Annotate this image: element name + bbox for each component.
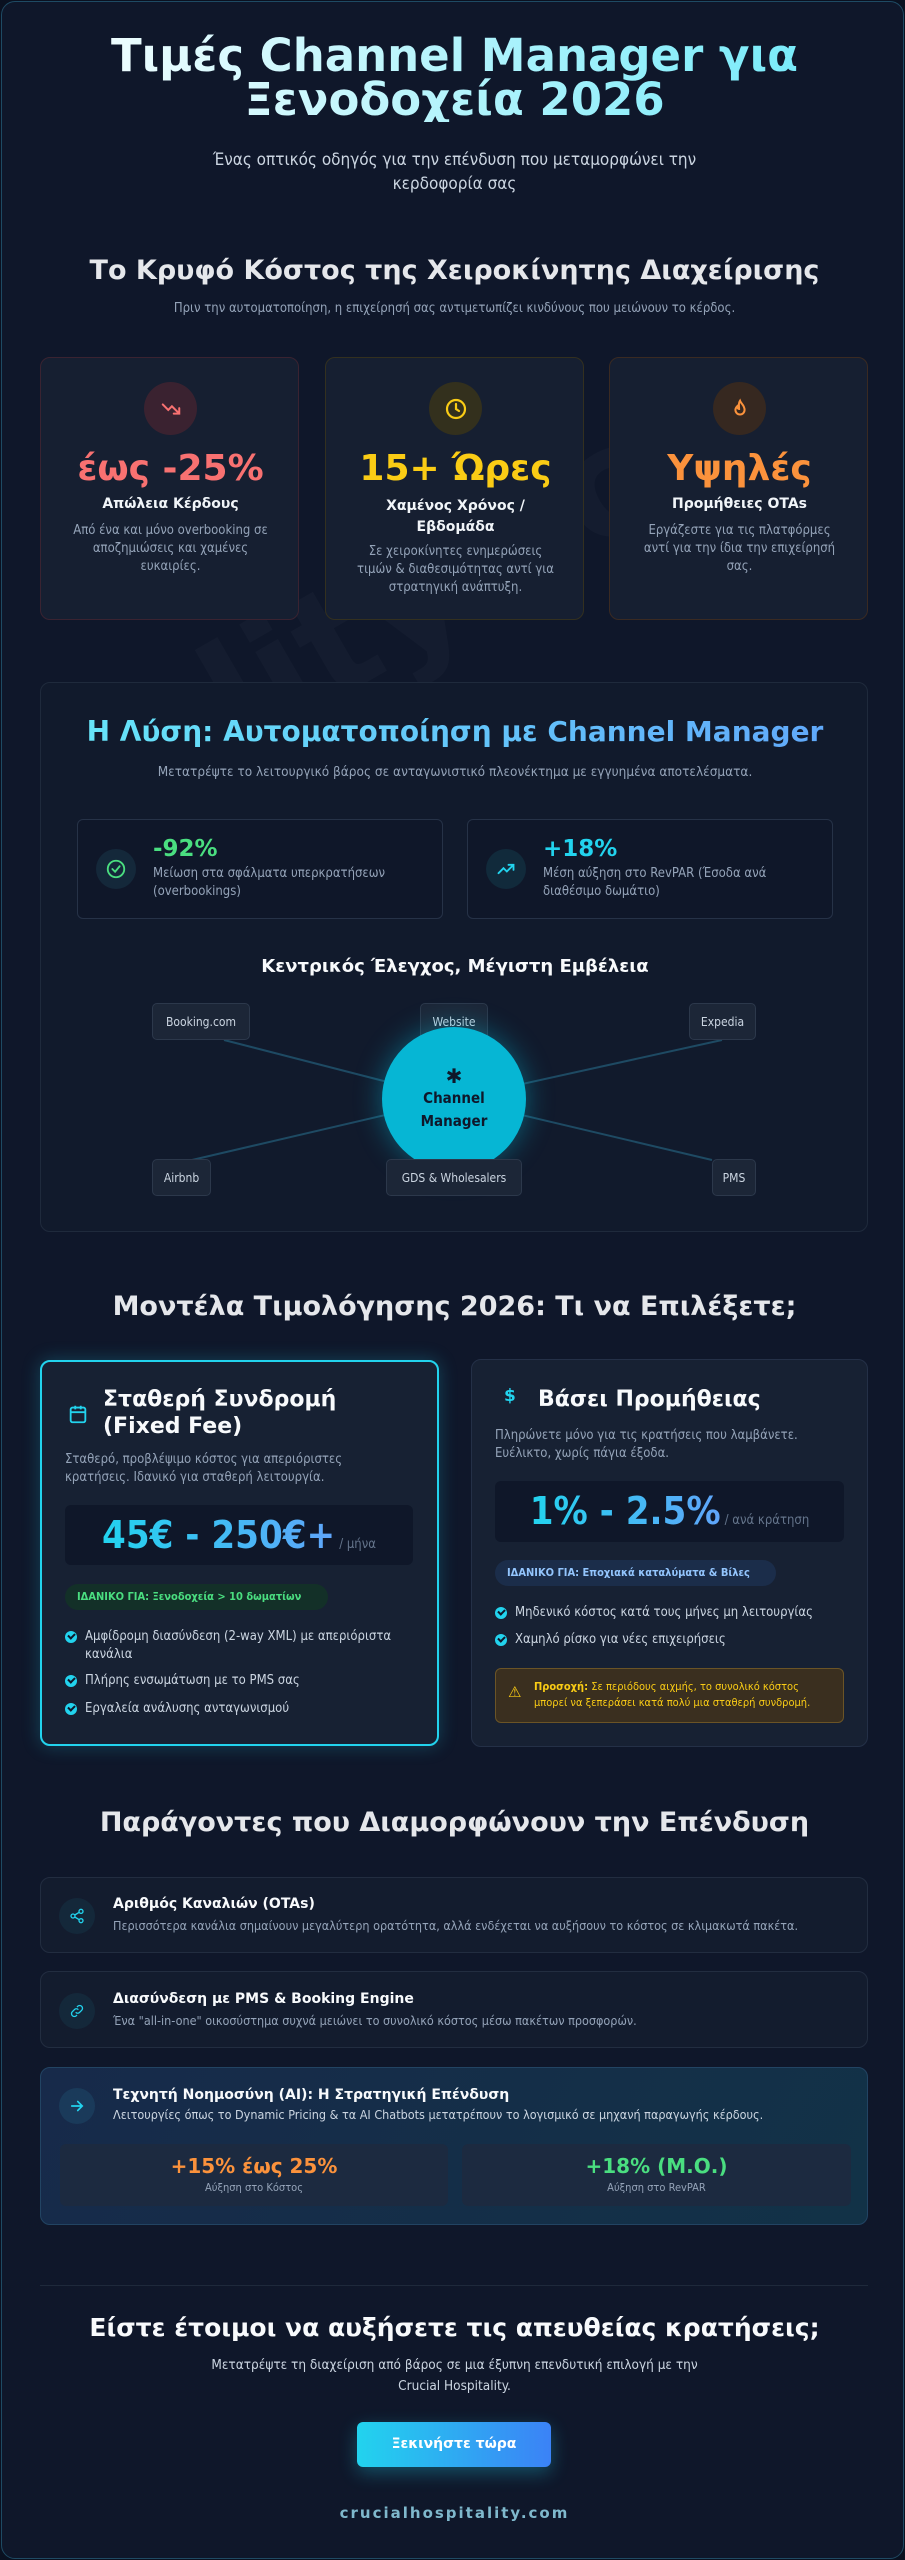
icon: dollar: $ (504, 1386, 516, 1406)
icon: link (59, 1993, 95, 2029)
factor title: Διασύνδεση με PMS & Booking Engine (113, 1991, 414, 2007)
metric: cost increase: Αύξηση στο Κόστος (205, 2181, 303, 2194)
stat value: +18% (543, 836, 617, 862)
CTA text (211, 2357, 698, 2394)
factor desc: Λειτουργίες όπως το Dynamic Pricing & τα AI Chatbots μετατρέπουν το λογισμικό σε μηχανή παραγωγής κέρδους. (113, 2107, 763, 2122)
CTA button: Ξεκινήστε τώρα (392, 2436, 516, 2452)
subtitle: Ένας οπτικός οδηγός για την επένδυση που μεταμορφώνει την κερδοφορία σας (213, 150, 696, 194)
node: Airbnb (152, 1159, 211, 1196)
label: Εβδομάδα (416, 519, 494, 535)
hub: Channel Manager: Manager (421, 1112, 487, 1130)
icon: trending up (486, 849, 526, 889)
price box: / μήνα (339, 1537, 376, 1552)
card: commission (471, 1359, 868, 1747)
title: Τιμές Channel Manager για (111, 29, 798, 82)
stat box: overbookings (77, 819, 443, 919)
factor: PMS (40, 1971, 868, 2048)
connector lines (192, 1040, 722, 1161)
heading: pricing models: Μοντέλα Τιμολόγησης 2026: Τι να Επιλέξετε; (113, 1291, 796, 1322)
card desc: Σταθερό, προβλέψιμο κόστος για απεριόριστες κρατήσεις. Ιδανικό για σταθερή λειτουργία. (65, 1452, 342, 1485)
watermark: tality.com (22, 304, 834, 873)
icon: trending down (144, 382, 197, 435)
node: Booking.com: Booking.com (166, 1014, 236, 1028)
node: PMS: PMS (723, 1170, 745, 1184)
icon: flame (713, 382, 766, 435)
heading: hidden cost: Το Κρυφό Κόστος της Χειροκίνητης Διαχείρισης (90, 255, 819, 286)
stat desc: Μέση αύξηση στο RevPAR (Έσοδα ανά διαθέσιμο δωμάτιο) (543, 866, 766, 899)
metric: revpar (462, 2144, 851, 2206)
card: OTA commissions (609, 357, 868, 620)
badge: ideal for seasonal (495, 1560, 776, 1586)
node: Website (420, 1003, 488, 1040)
CTA button (357, 2422, 551, 2467)
price box: 1% - 2.5% (530, 1489, 721, 1533)
price box: 45€ - 250€+ (102, 1513, 335, 1557)
panel: solution (40, 682, 868, 1232)
diagram: channel hub (152, 1003, 756, 1196)
bullet list: Εργαλεία ανάλυσης ανταγωνισμού (85, 1701, 289, 1716)
callout: warning: ⚠ (508, 1683, 521, 1701)
title (2, 34, 905, 122)
card: profit loss (40, 357, 299, 620)
price box (65, 1505, 413, 1565)
metric: revpar: Αύξηση στο RevPAR (607, 2181, 706, 2194)
metric: revpar: +18% (Μ.Ο.) (586, 2154, 727, 2178)
factor title: Αριθμός Καναλιών (OTAs) (113, 1896, 315, 1912)
callout: warning: Προσοχή: Σε περιόδους αιχμής, το συνολικό κόστος μπορεί να ξεπεράσει κατά πολύ μια σταθερή συνδρομή. (534, 1680, 810, 1709)
bullet list (65, 1629, 391, 1716)
callout: warning (495, 1668, 844, 1723)
label (386, 498, 525, 535)
card title: (Fixed Fee) (103, 1414, 242, 1439)
node: PMS (712, 1159, 756, 1196)
stat box: revpar (467, 819, 833, 919)
label: Χαμένος Χρόνος / (386, 498, 525, 514)
hub: Channel Manager (382, 1027, 526, 1171)
title: Ξενοδοχεία 2026 (244, 73, 665, 126)
factor desc: Ένα "all-in-one" οικοσύστημα συχνά μειώνει το συνολικό κόστος μέσω πακέτων προσφορών. (113, 2013, 637, 2028)
hub: Channel Manager: Channel (423, 1089, 485, 1107)
node: Expedia (689, 1003, 756, 1040)
card title: Βάσει Προμήθειας (538, 1387, 761, 1412)
heading: central control: Κεντρικός Έλεγχος, Μέγιστη Εμβέλεια (261, 956, 649, 977)
subtext: hidden cost: Πριν την αυτοματοποίηση, η επιχείρησή σας αντιμετωπίζει κινδύνους που μειώνουν το κέρδος. (174, 301, 735, 316)
stat: Υψηλές (667, 448, 812, 489)
badge: ideal for hotels (65, 1584, 328, 1610)
factor title: Τεχνητή Νοημοσύνη (AI): Η Στρατηγική Επένδυση (113, 2087, 509, 2103)
bullet list: Πλήρης ενσωμάτωση με το PMS σας (85, 1673, 300, 1688)
heading: factors: Παράγοντες που Διαμορφώνουν την Επένδυση (100, 1807, 809, 1838)
desc: Εργάζεστε για τις πλατφόρμες αντί για την ίδια την επιχείρησή σας. (644, 523, 835, 574)
badge: ideal for seasonal: ΙΔΑΝΙΚΟ ΓΙΑ: Εποχιακά καταλύματα & Βίλες (507, 1566, 750, 1579)
icon: puzzle: ✱ (446, 1064, 462, 1088)
stat: 15+ Ώρες (359, 448, 552, 489)
card title: Σταθερή Συνδρομή (103, 1387, 336, 1412)
stat value: -92% (153, 836, 218, 862)
node: Airbnb: Airbnb (164, 1170, 199, 1184)
CTA heading: Είστε έτοιμοι να αυξήσετε τις απευθείας κρατήσεις; (89, 2313, 820, 2342)
price box (495, 1481, 844, 1542)
metric: cost increase: +15% έως 25% (171, 2154, 337, 2178)
node: Booking.com (152, 1003, 250, 1040)
card: fixed fee (40, 1360, 439, 1746)
price box: / ανά κράτηση (725, 1513, 809, 1528)
icon: clock (429, 382, 482, 435)
icon: share (59, 1898, 95, 1934)
bullet list: Χαμηλό ρίσκο για νέες επιχειρήσεις (515, 1632, 726, 1647)
stat: έως -25% (77, 448, 264, 489)
subtext: solution: Μετατρέψτε το λειτουργικό βάρος σε ανταγωνιστικό πλεονέκτημα με εγγυημένα αποτελέσματα. (158, 764, 752, 780)
card desc: Πληρώνετε μόνο για τις κρατήσεις που λαμβάνετε. Ευέλικτο, χωρίς πάγια έξοδα. (495, 1428, 798, 1461)
node: Website: Website (432, 1014, 475, 1028)
CTA text: Crucial Hospitality. (398, 2378, 511, 2394)
node: GDS (386, 1159, 522, 1196)
desc: Σε χειροκίνητες ενημερώσεις τιμών & διαθεσιμότητας αντί για στρατηγική ανάπτυξη. (357, 544, 554, 595)
desc: Από ένα και μόνο overbooking σε αποζημιώσεις και χαμένες ευκαιρίες. (73, 523, 268, 574)
node: Expedia: Expedia (701, 1014, 744, 1028)
icon: check circle (96, 849, 136, 889)
label: Απώλεια Κέρδους (102, 496, 239, 512)
badge: ideal for hotels: ΙΔΑΝΙΚΟ ΓΙΑ: Ξενοδοχεία > 10 δωματίων (77, 1590, 301, 1603)
bullet list: Μηδενικό κόστος κατά τους μήνες μη λειτουργίας (515, 1605, 813, 1620)
heading: solution: Η Λύση: Αυτοματοποίηση με Channel Manager (87, 715, 823, 748)
node: GDS: GDS & Wholesalers (402, 1170, 506, 1184)
card: lost time (325, 357, 584, 620)
footer: crucialhospitality.com (340, 2504, 569, 2522)
bullet list (495, 1605, 813, 1647)
icon: arrow (59, 2088, 95, 2124)
factor desc: Περισσότερα κανάλια σημαίνουν μεγαλύτερη ορατότητα, αλλά ενδέχεται να αυξήσουν το κόστος σε κλιμακωτά πακέτα. (113, 1918, 798, 1933)
stat desc: Μείωση στα σφάλματα υπερκρατήσεων (overbookings) (153, 866, 385, 899)
label: Προμήθειες OTAs (672, 496, 807, 512)
CTA text: Μετατρέψτε τη διαχείριση από βάρος σε μια έξυπνη επενδυτική επιλογή με την (211, 2357, 698, 2373)
icon: calendar (70, 1406, 86, 1424)
factor: channels (40, 1877, 868, 1953)
metric: cost increase (60, 2144, 448, 2206)
bullet list: Αμφίδρομη διασύνδεση (2-way XML) με απεριόριστα κανάλια (85, 1629, 391, 1662)
factor: AI (40, 2067, 868, 2225)
card title (103, 1387, 336, 1439)
